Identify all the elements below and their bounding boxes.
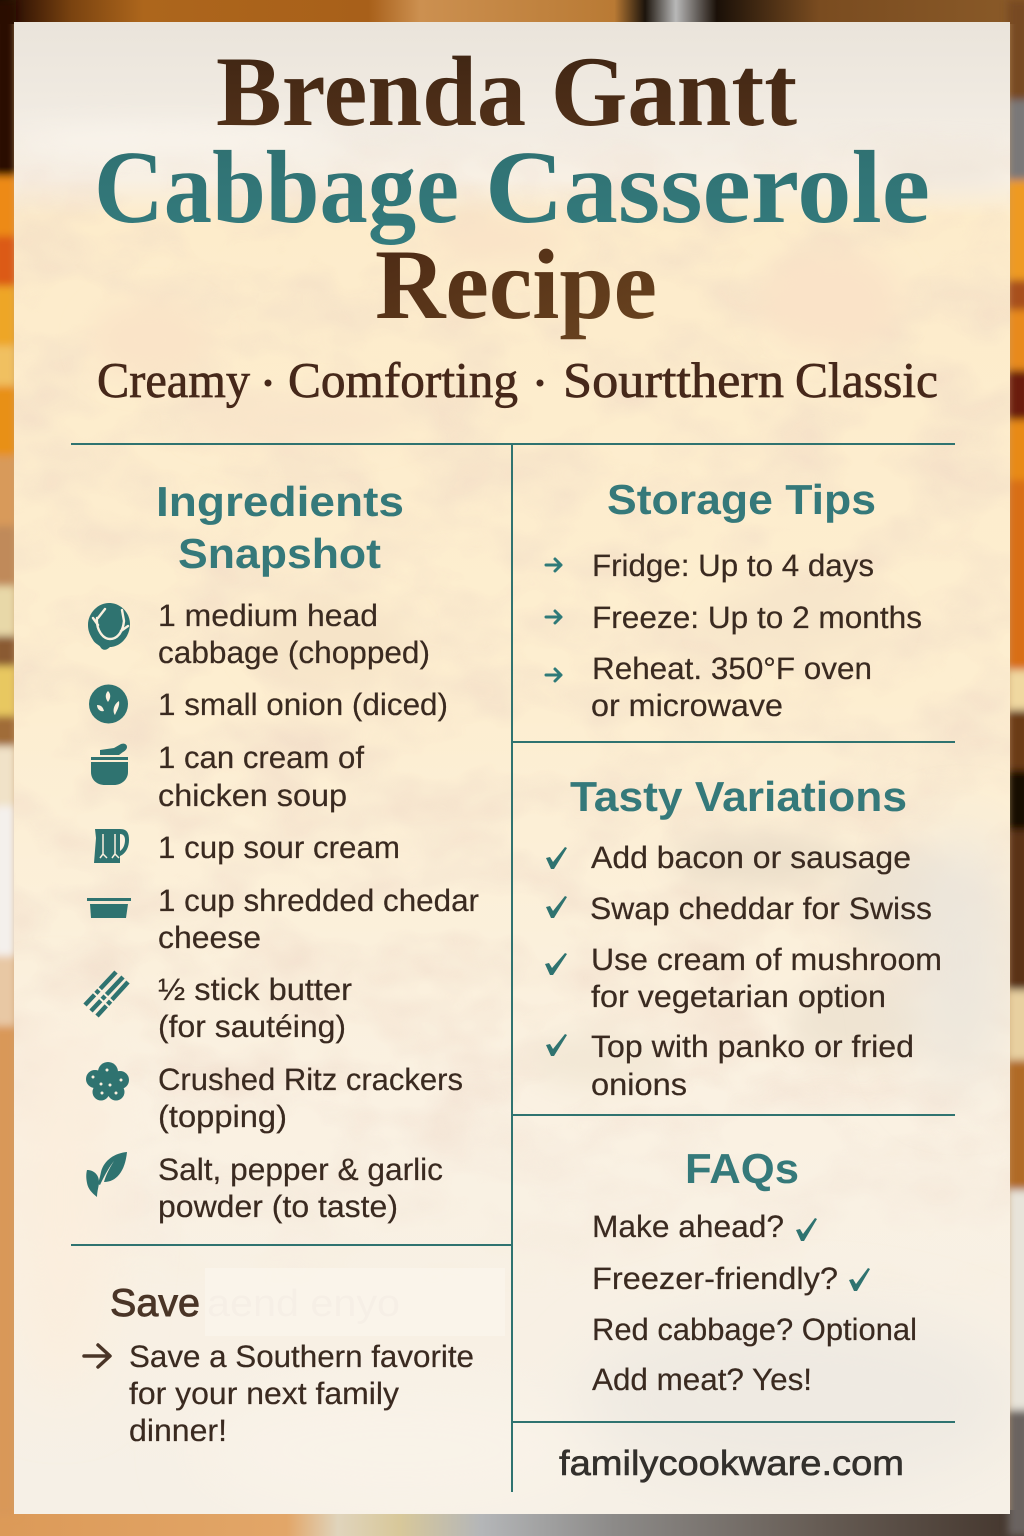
text: cabbage xyxy=(158,598,430,670)
text: crackers: (topping) xyxy=(158,1099,287,1134)
text: save: for your next family xyxy=(129,1376,400,1411)
ghost patch xyxy=(205,1268,505,1336)
subtitle: Classic xyxy=(795,352,938,408)
text: cabbage: 1 medium head xyxy=(158,598,378,633)
title block xyxy=(94,36,938,408)
icon: crackers xyxy=(86,1062,129,1100)
text: crackers xyxy=(158,1062,463,1134)
text: mushroom: for vegetarian option xyxy=(591,979,886,1014)
icon: butter sticks xyxy=(85,972,128,1016)
heading: Tasty Variations: Tasty Variations xyxy=(570,773,907,820)
check xyxy=(796,1218,817,1241)
icon: sour cream jug xyxy=(94,829,129,863)
heading: Save: Save xyxy=(110,1282,200,1325)
text: add meat: Add meat? Yes! xyxy=(592,1362,812,1397)
check xyxy=(545,953,567,975)
text: freeze: Freeze: Up to 2 months xyxy=(592,600,922,635)
title: Cabbage Casserole: Casserole xyxy=(485,130,930,245)
panel: storage tips xyxy=(546,476,922,723)
text: panko xyxy=(591,1029,914,1102)
check xyxy=(546,896,567,918)
text: red cabbage: Red cabbage? Optional xyxy=(592,1312,917,1347)
text: cheese: 1 cup shredded chedar xyxy=(158,883,479,918)
icon: cheese dish xyxy=(87,898,131,918)
text: seasoning xyxy=(158,1152,443,1224)
heading: Ingredients Snapshot: Ingredients xyxy=(156,478,404,525)
check xyxy=(546,847,567,869)
text: soup: 1 can cream of xyxy=(158,740,364,775)
text: reheat: or microwave xyxy=(591,688,783,723)
text: mushroom xyxy=(591,942,942,1014)
panel: tasty variations xyxy=(545,773,942,1102)
subtitle: Comforting xyxy=(288,352,518,408)
text: cheese xyxy=(158,883,479,955)
text: panko: onions xyxy=(591,1067,687,1102)
heading: Ingredients Snapshot xyxy=(156,478,404,577)
subtitle xyxy=(97,352,938,408)
panel: ingredients xyxy=(85,478,479,1224)
text: panko: Top with panko or fried xyxy=(591,1029,914,1064)
text: crackers: Crushed Ritz crackers xyxy=(158,1062,463,1097)
panel: FAQs xyxy=(592,1145,917,1397)
panel: save xyxy=(84,1282,474,1448)
text: save: dinner! xyxy=(129,1413,227,1448)
text: reheat: Reheat. 350°F oven xyxy=(592,651,872,686)
text: save: Save a Southern favorite xyxy=(129,1339,474,1374)
arrow: save xyxy=(84,1345,110,1367)
text: soup xyxy=(158,740,364,813)
heading: Ingredients Snapshot: Snapshot xyxy=(178,530,381,577)
icon: onion xyxy=(89,684,128,724)
text: save xyxy=(129,1339,474,1448)
check xyxy=(546,1034,567,1056)
text: make ahead: Make ahead? xyxy=(592,1209,784,1244)
text: seasoning: powder (to taste) xyxy=(158,1189,398,1224)
subtitle: Creamy xyxy=(97,352,250,408)
subtitle: Sourtthern xyxy=(563,352,784,408)
text: cheese: cheese xyxy=(158,920,261,955)
heading: FAQs: FAQs xyxy=(685,1145,799,1192)
icon: soup bowl xyxy=(91,744,128,785)
text: fridge: Fridge: Up to 4 days xyxy=(592,548,874,583)
text: soup: chicken soup xyxy=(158,778,347,813)
arrow: fridge xyxy=(546,559,561,571)
text: swiss: Swap cheddar for Swiss xyxy=(590,891,932,926)
text: sour cream: 1 cup sour cream xyxy=(158,830,400,865)
text: butter: ½ stick butter xyxy=(158,972,352,1007)
title: Cabbage Casserole: Cabbage xyxy=(94,130,459,245)
check xyxy=(849,1268,870,1291)
text: butter: (for sautéing) xyxy=(158,1009,346,1044)
icon: seasoning leaf xyxy=(86,1152,127,1197)
icon: cabbage xyxy=(88,603,130,650)
text: freezer: Freezer-friendly? xyxy=(592,1261,838,1296)
footer: website: familycookware.com xyxy=(559,1444,904,1483)
text: butter xyxy=(158,972,352,1044)
text: reheat xyxy=(591,651,872,723)
title: Recipe: Recipe xyxy=(375,229,657,340)
text: mushroom: Use cream of mushroom xyxy=(591,942,942,977)
arrow: freeze xyxy=(546,611,561,623)
title: Brenda Gantt: Brenda Gantt xyxy=(216,36,797,147)
text: seasoning: Salt, pepper & garlic xyxy=(158,1152,443,1187)
title: Cabbage Casserole xyxy=(94,130,930,245)
heading: Storage Tips: Storage Tips xyxy=(607,476,876,523)
text: bacon: Add bacon or sausage xyxy=(591,840,911,875)
ghost patch: aend enyo xyxy=(207,1283,400,1325)
arrow: reheat xyxy=(546,669,561,681)
text: onion: 1 small onion (diced) xyxy=(158,687,448,722)
text: cabbage: cabbage (chopped) xyxy=(158,635,430,670)
